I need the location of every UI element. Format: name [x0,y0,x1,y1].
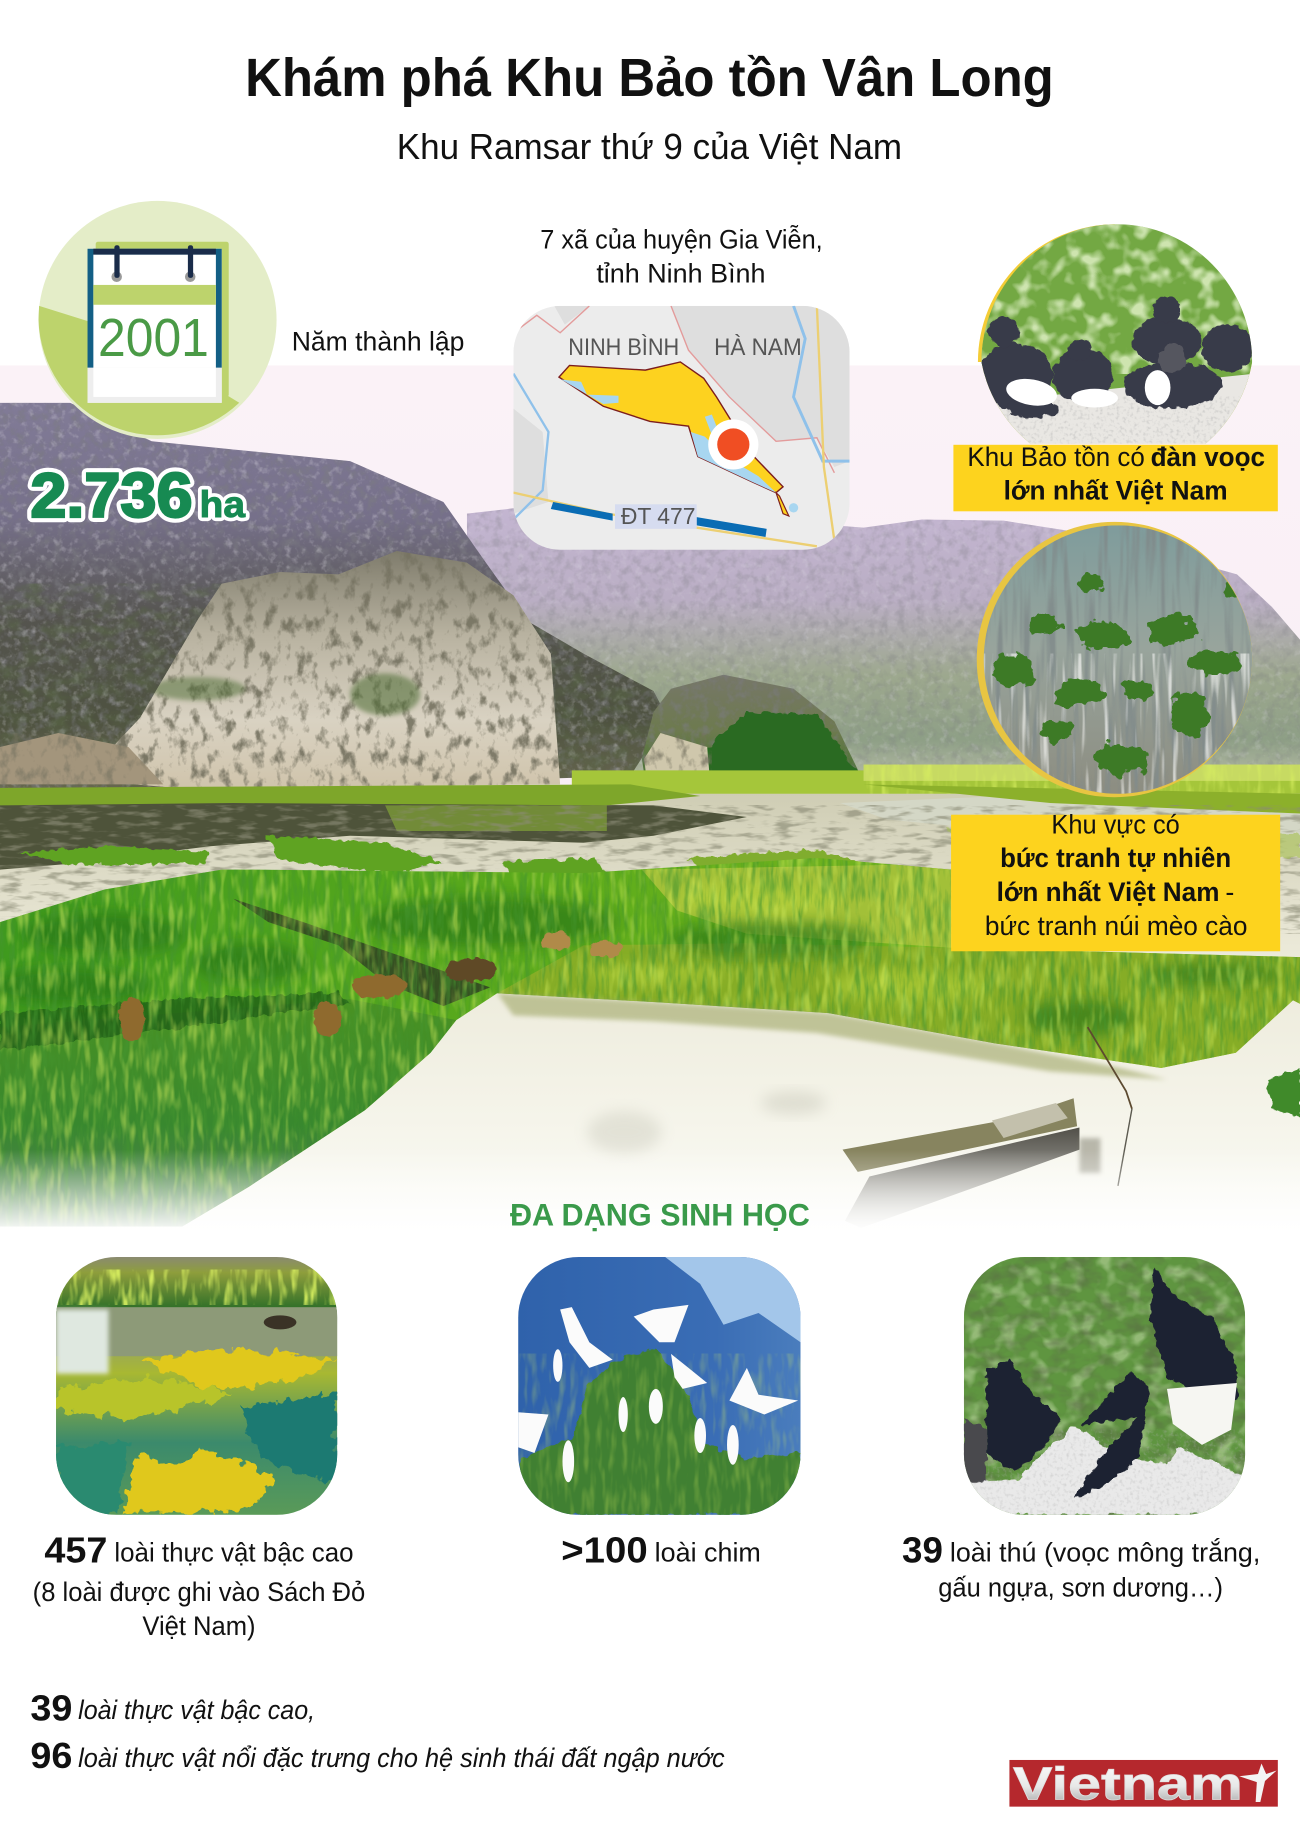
fade [0,1150,1300,1234]
callout: langur: Khu Bảo tồn có [967,442,1145,472]
note: other species [30,1687,725,1776]
boat [845,1127,1079,1228]
label: founding year: Năm thành lập [292,326,464,356]
water [0,794,1300,1231]
panel: langur photo circle [978,224,1252,444]
photo: langurs [964,1257,1245,1517]
back mountains [467,502,1300,782]
logo: Vietnam+: Vietnam [1013,1758,1243,1810]
icon: calendar 2001 [39,201,277,439]
grass strips [19,829,1300,880]
location text: tỉnh Ninh Bình [596,259,766,289]
left mountain [0,397,677,800]
map: NINH BÌNH [568,334,679,361]
icon: calendar 2001: 2001 [98,308,209,368]
area: 2.736 ha: 2.736 [30,461,193,531]
callout: natural painting: lớn nhất Việt Nam [997,877,1219,907]
callout: langur: đàn voọc [1151,442,1265,472]
stat: mammals [902,1530,1260,1603]
area: 2.736 ha: ha [200,483,245,525]
photo: aquatic plants [56,1257,337,1515]
note: other species: loài thực vật nổi đặc trưng cho hệ sinh thái đất ngập nước [78,1743,725,1773]
stat: plants: 457 [44,1530,107,1571]
stat: mammals: loài thú (voọc mông trắng, [950,1537,1260,1568]
callout: natural painting: Khu vực có [1051,809,1180,839]
area: 2.736 ha: 2.736 [30,461,193,531]
far field [572,770,1300,798]
location text [540,224,823,289]
map: HÀ NAM [714,334,802,361]
water smudges [761,1091,826,1115]
rock island [642,674,858,770]
stat: birds: >100 [561,1530,648,1571]
location text: 7 xã của huyện Gia Viễn, [540,224,823,255]
panel: landscape photo background [0,365,1300,1256]
stat: plants: loài thực vật bậc cao [114,1538,354,1568]
light cliff [115,551,560,787]
heading: biodiversity: ĐA DẠNG SINH HỌC [510,1196,810,1232]
callout: natural painting: - [1225,877,1234,907]
buffalo [119,931,622,1041]
stat: plants [33,1530,365,1641]
map: ĐT 477 [621,503,696,529]
stat: birds: loài chim [655,1538,761,1568]
callout: natural painting: bức tranh núi mèo cào [985,911,1247,941]
note: other species: 39 [30,1687,72,1728]
water marks mid [0,805,1300,934]
area: 2.736 ha: ha [200,483,245,525]
note: other species: 96 [30,1735,72,1776]
callout: langur: lớn nhất Việt Nam [1004,476,1228,506]
panel: cliff photo circle [977,522,1260,800]
note: other species: loài thực vật bậc cao, [78,1695,315,1725]
stat: plants: Việt Nam) [142,1611,256,1641]
map [513,306,850,550]
stat: plants: (8 loài được ghi vào Sách Đỏ [33,1577,365,1607]
callout: natural painting [951,809,1280,951]
stat: mammals: gấu ngựa, sơn dương…) [938,1573,1223,1603]
stat: mammals: 39 [902,1530,943,1571]
subtitle: Khu Ramsar thứ 9 của Việt Nam [397,126,902,167]
marsh [0,858,1300,1231]
logo: Vietnam+ [1009,1758,1278,1810]
title: Khám phá Khu Bảo tồn Vân Long [245,48,1054,108]
stat: birds [561,1530,761,1571]
callout: natural painting: bức tranh tự nhiên [1000,843,1231,873]
photo: egrets [518,1257,801,1517]
callout: langur [953,442,1278,511]
